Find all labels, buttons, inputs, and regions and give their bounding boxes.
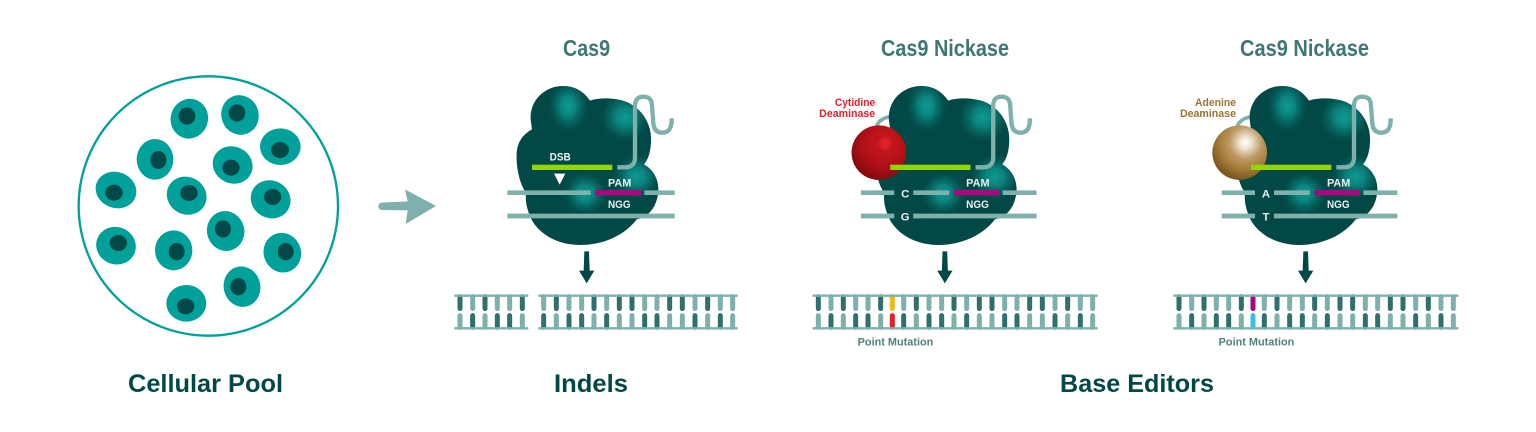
DNA strands — [861, 193, 1037, 216]
label: point mutation: Point Mutation — [858, 336, 934, 348]
DNA: A to G point mutation — [1173, 296, 1458, 348]
label: DSB: DSB — [550, 152, 571, 164]
guide RNA bar — [890, 165, 971, 170]
linker — [1237, 117, 1252, 126]
arrow: pool to editors — [378, 189, 436, 224]
arrow: adenine editor down — [1298, 251, 1313, 283]
label: adenine deaminase: Adenine — [1195, 97, 1236, 109]
guide RNA bar — [532, 165, 612, 170]
DNA: C to T point mutation — [813, 296, 1098, 348]
heading: Cas9 Nickase 1: Cas9 Nickase — [881, 35, 1009, 61]
base A: A — [1262, 189, 1270, 201]
cells — [90, 90, 307, 322]
base G: G — [901, 211, 910, 223]
label: PAM: PAM — [608, 178, 631, 190]
cut site marker — [554, 174, 565, 185]
label: cytidine deaminase — [819, 97, 875, 120]
arrow: cytidine editor down — [937, 251, 953, 283]
section label: Cellular Pool: Cellular Pool — [128, 370, 283, 398]
label: cytidine deaminase: Deaminase — [819, 108, 875, 120]
heading: Cas9 Nickase 2: Cas9 Nickase — [1240, 35, 1369, 61]
label: adenine deaminase: Deaminase — [1180, 108, 1236, 120]
panel: adenine base editor — [1180, 78, 1397, 245]
DNA strands — [1222, 193, 1397, 216]
protein body — [1236, 78, 1391, 245]
panel: cellular pool — [79, 76, 338, 336]
adenine deaminase sphere — [1212, 125, 1267, 180]
pool circle outline — [79, 76, 338, 336]
section label: Indels: Indels — [554, 370, 628, 398]
DNA strands — [507, 193, 675, 216]
label: NGG: NGG — [1327, 199, 1350, 211]
base T: T — [1263, 211, 1270, 223]
protein body — [875, 78, 1030, 245]
label: PAM: PAM — [966, 178, 990, 190]
label: NGG: NGG — [966, 199, 989, 211]
linker — [877, 117, 891, 126]
label: PAM: PAM — [1327, 178, 1350, 190]
heading: Cas9: Cas9 — [563, 35, 610, 61]
label: adenine deaminase — [1180, 97, 1236, 120]
panel: cytidine base editor — [819, 78, 1037, 245]
label: NGG: NGG — [608, 199, 631, 211]
protein body — [517, 78, 672, 245]
cytidine deaminase sphere — [852, 125, 906, 180]
label: point mutation: Point Mutation — [1219, 336, 1295, 348]
arrow: Cas9 down — [579, 251, 594, 283]
panel: Cas9 complex — [507, 78, 675, 245]
section label: Base Editors: Base Editors — [1060, 370, 1214, 398]
DNA: indels with double-strand break — [454, 296, 738, 328]
label: cytidine deaminase: Cytidine — [835, 97, 875, 109]
base C: C — [901, 189, 909, 201]
guide RNA bar — [1251, 165, 1331, 170]
